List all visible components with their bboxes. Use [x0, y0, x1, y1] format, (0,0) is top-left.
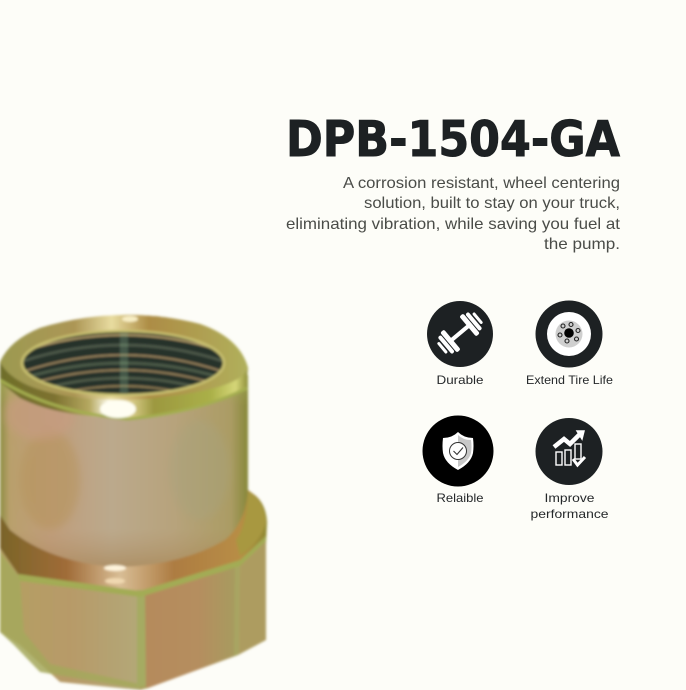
feature: Relaible [422, 416, 494, 505]
inner lip [22, 331, 224, 395]
icon: performance chart [536, 418, 602, 485]
icon: dumbbell [427, 301, 493, 367]
collar and flange backing [0, 490, 267, 594]
flange top lip [236, 492, 266, 556]
hex nut faces [0, 536, 266, 690]
title: DPB-1504-GA [286, 111, 620, 168]
bore and threads [23, 332, 223, 394]
main body [0, 375, 248, 567]
description: the pump. [544, 236, 620, 253]
label [530, 491, 609, 521]
description: eliminating vibration, while saving you fuel at [286, 216, 621, 233]
description [286, 175, 621, 253]
label: performance [530, 507, 609, 521]
green rim edge [0, 380, 247, 419]
label: Relaible [436, 491, 484, 505]
feature: Extend Tire Life [526, 300, 613, 387]
description: solution, built to stay on your truck, [364, 195, 620, 212]
icon: tire [536, 300, 602, 368]
feature: Improve performance [530, 418, 609, 521]
label: Improve [544, 491, 595, 505]
product photo: threaded nut [0, 315, 267, 690]
outer rim [0, 315, 248, 418]
label: Durable [436, 373, 484, 387]
icon: shield [422, 416, 494, 486]
description: A corrosion resistant, wheel centering [343, 175, 620, 192]
feature: Durable [427, 301, 493, 387]
specular highlight [100, 400, 136, 418]
label: Extend Tire Life [526, 373, 613, 387]
